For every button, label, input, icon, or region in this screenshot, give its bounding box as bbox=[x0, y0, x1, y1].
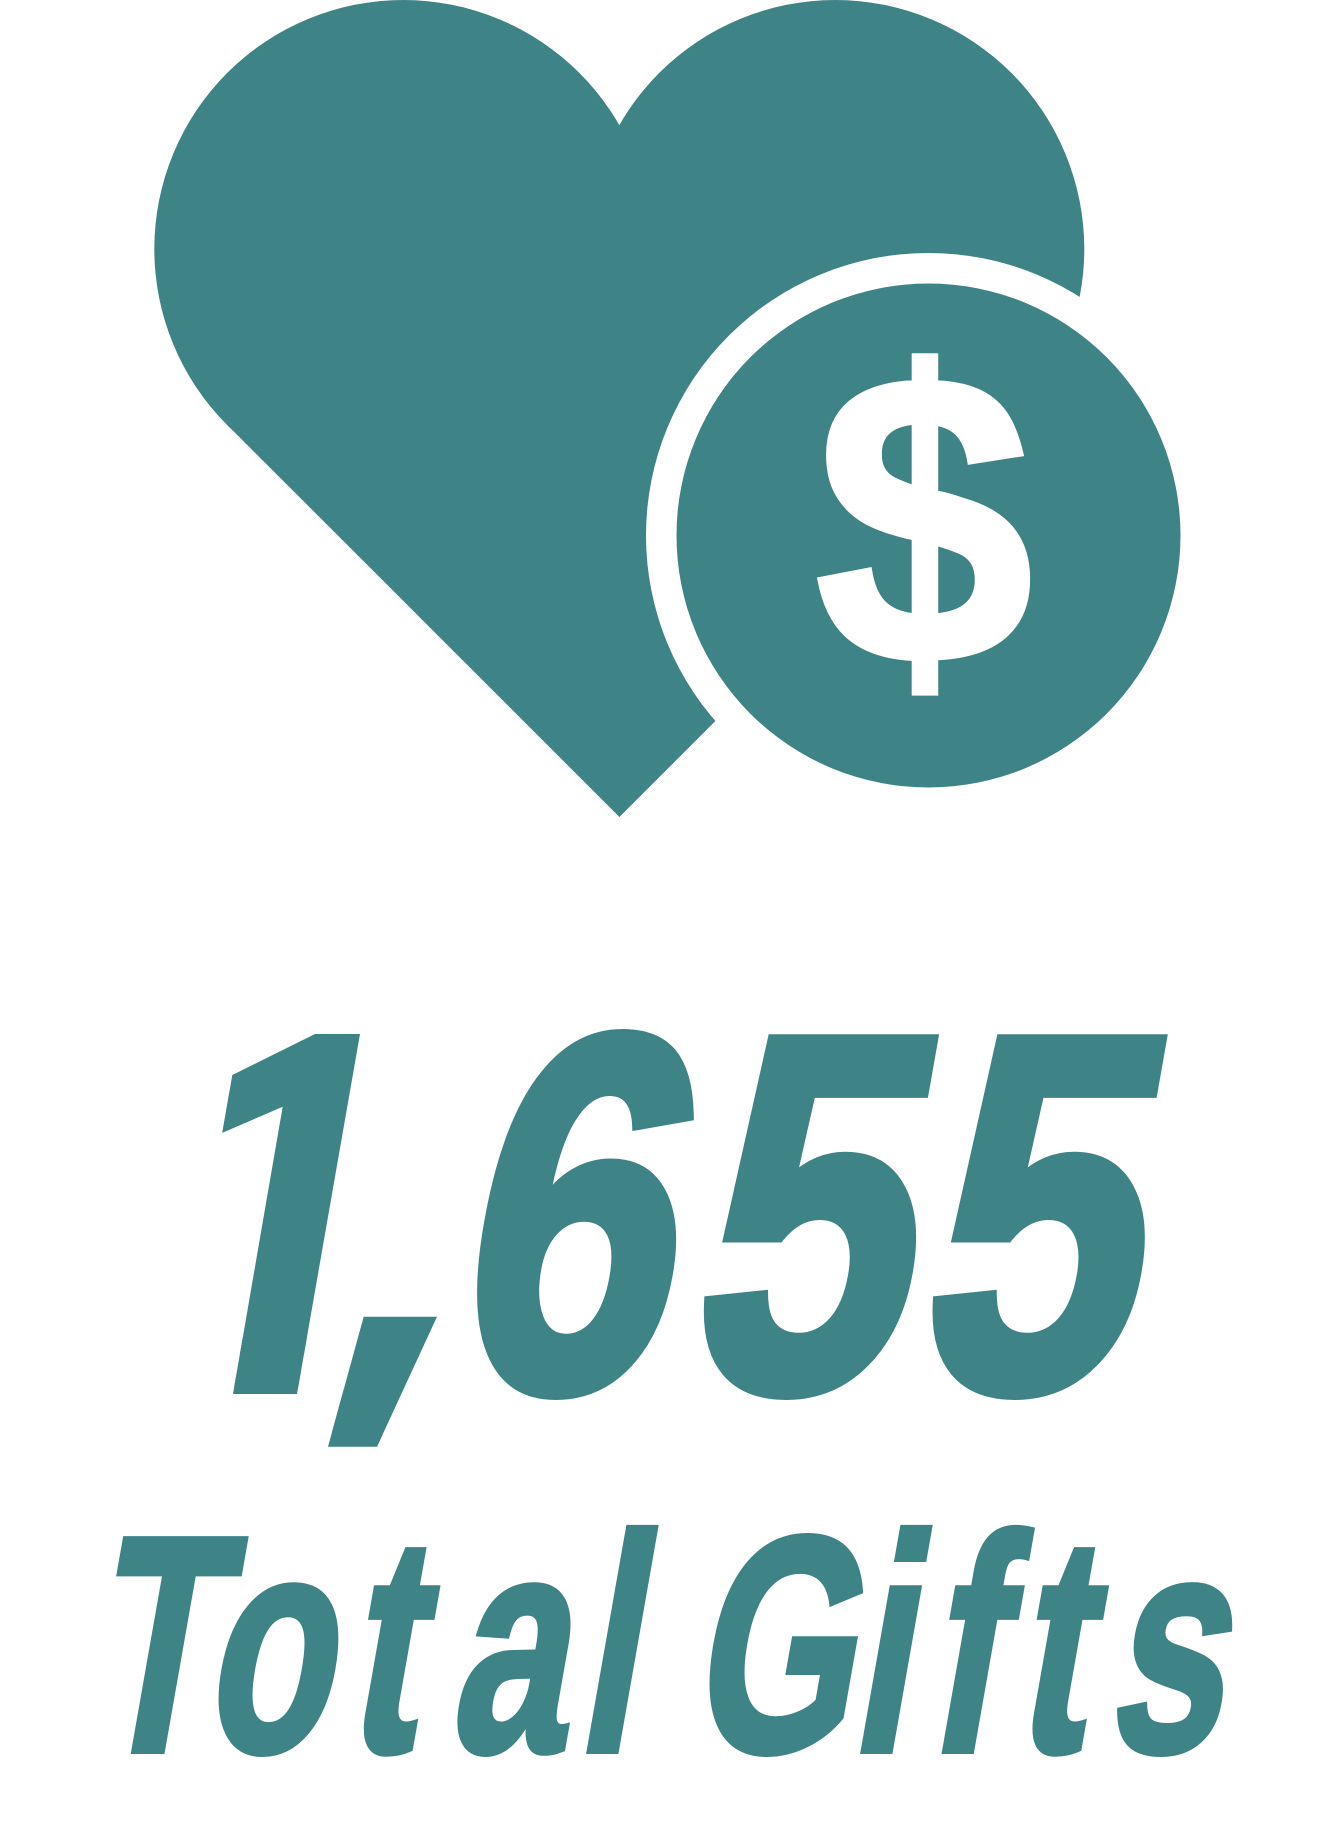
coin cutout ring bbox=[646, 253, 1211, 818]
icon: heart with dollar coin bbox=[154, 0, 1211, 818]
big number: 655 bbox=[426, 930, 1208, 1497]
label: Total Gifts: Total Gifts bbox=[73, 1473, 1269, 1817]
big number: 1 bbox=[127, 930, 444, 1497]
icon: dollar sign: $ bbox=[815, 290, 1033, 750]
big number: , bbox=[262, 541, 540, 1658]
icon: coin bbox=[676, 284, 1180, 788]
big number bbox=[222, 1029, 1168, 1447]
icon: heart bbox=[154, 0, 1084, 817]
